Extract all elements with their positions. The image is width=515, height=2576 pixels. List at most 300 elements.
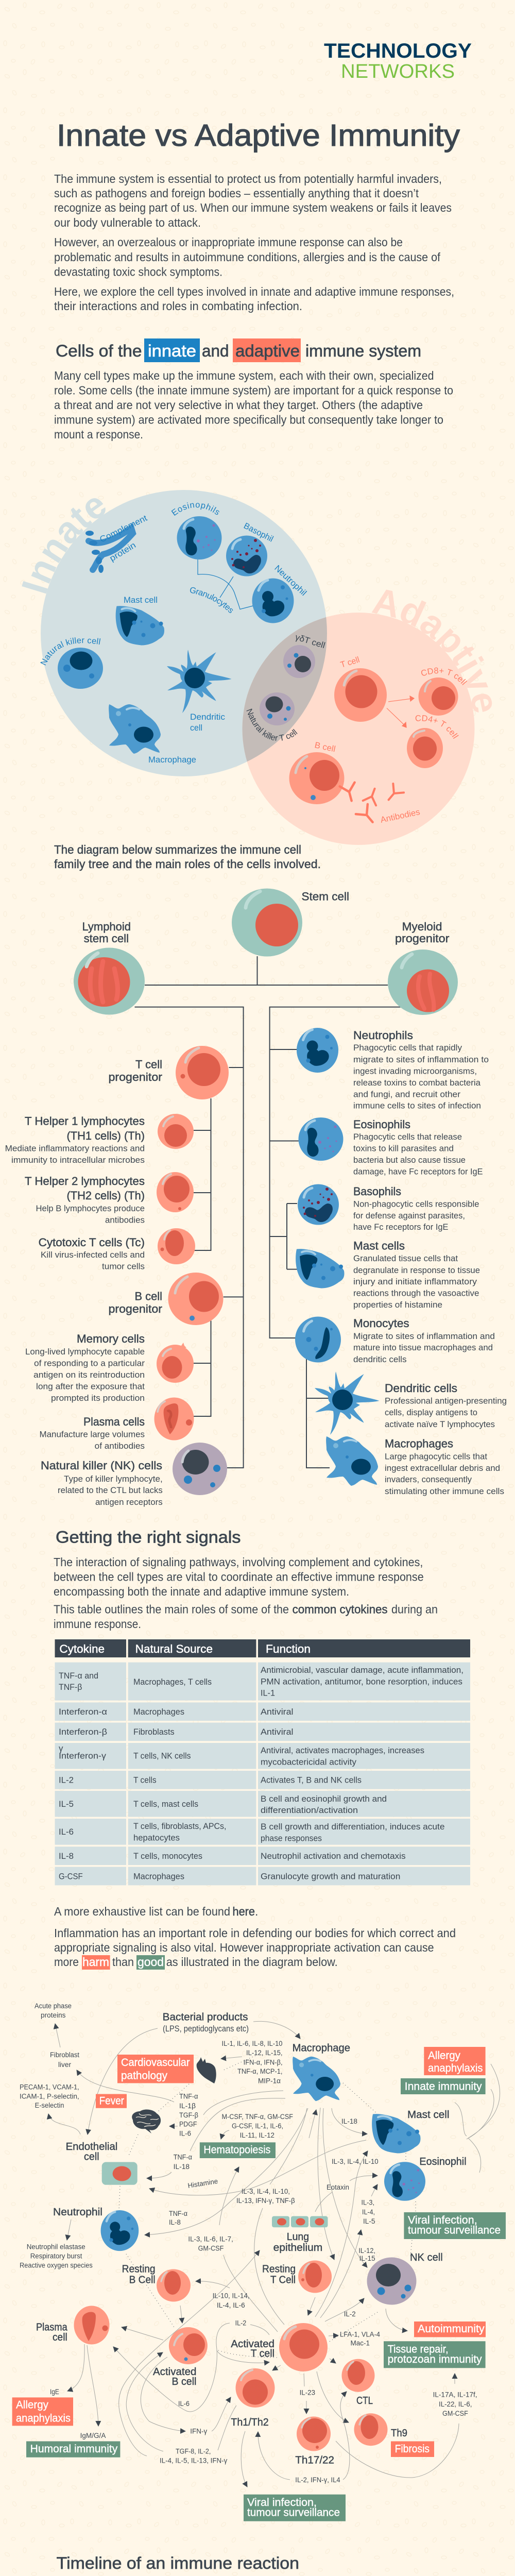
intro text: The immune system is essential to protect us from potentially harmful invaders,	[54, 172, 442, 185]
myeloid progenitor: Myeloid	[402, 920, 442, 933]
table header	[55, 1639, 470, 1657]
box: cardiovascular pathology: Cardiovascular	[121, 2057, 190, 2069]
heading: timeline of an immune reaction: Timeline of an immune reaction	[57, 2554, 299, 2572]
network: CTL cell: CTL	[356, 2395, 373, 2406]
table text: T cells, monocytes	[133, 1851, 202, 1861]
table text: B cell growth and differentiation, induces acute	[261, 1822, 445, 1832]
inflammation paragraph: A more exhaustive list can be found	[54, 1905, 230, 1918]
network: eosinophil: Eosinophil	[419, 2156, 467, 2167]
table text: mycobactericidal activity	[261, 1757, 357, 1767]
network labels: cytokines: IL-1, IL-6, IL-8, IL-10	[221, 2040, 282, 2047]
cytotoxic T cells	[39, 1228, 195, 1272]
macrophages: stimulating other immune cells	[385, 1486, 504, 1496]
table text: phase responses	[261, 1833, 322, 1843]
box: allergy anaphylaxis (left)	[12, 2397, 73, 2426]
neutrophils: Phagocytic cells that rapidly	[353, 1043, 462, 1053]
intro text: such as pathogens and foreign bodies – essentially anything that it doesn’t	[54, 187, 419, 200]
basophil	[226, 521, 275, 576]
table text: G-CSF	[59, 1871, 83, 1882]
network labels: cytokines: MIP-1α	[258, 2077, 281, 2084]
network labels: cytokines: proteins	[41, 2011, 66, 2019]
logo: Technology Networks: TECHNOLOGY	[324, 40, 472, 62]
dendritic cells	[315, 1371, 507, 1435]
network: activated B cell: B cell	[172, 2376, 196, 2387]
CD8 T cell	[418, 668, 468, 716]
network labels: cytokines: Eotaxin	[327, 2183, 349, 2191]
network: activated B cell	[153, 2327, 208, 2387]
plasma cells: Manufacture large volumes	[39, 1430, 145, 1439]
inflammation paragraph: here	[233, 1905, 255, 1918]
dendritic cell: Dendritic	[190, 713, 225, 722]
natural killer T cell: Natural killer T cell	[246, 709, 298, 741]
arrows T cell to CD8 and CD4	[387, 696, 414, 727]
cytotoxic T cells: Kill virus-infected cells and	[41, 1250, 145, 1260]
family tree intro	[54, 843, 321, 871]
network: endothelial cell: cell	[84, 2151, 99, 2163]
network labels: cytokines: Acute phase	[35, 2002, 72, 2010]
natural killer cell: Natural killer cell	[40, 637, 101, 666]
table text	[59, 1665, 464, 1882]
intro text: their interactions and roles in combating infection.	[54, 299, 302, 313]
macrophages: invaders, consequently	[385, 1475, 472, 1484]
network: Th1/Th2 cell: Th1/Th2	[231, 2417, 269, 2428]
network: NK cell: NK cell	[410, 2252, 443, 2263]
network labels: cytokines: IL-13, IFN-γ, TNF-β	[236, 2197, 295, 2205]
neutrophils: and fungi, and recruit other	[353, 1089, 460, 1099]
inflammation network: connector arrows	[48, 2021, 500, 2487]
macrophages	[326, 1436, 504, 1496]
mast cells: injury and initiate inflammatory	[353, 1277, 477, 1286]
network labels: cytokines: Neutrophil elastase	[27, 2243, 85, 2250]
monocytes: dendritic cells	[353, 1354, 407, 1364]
box: viral infection, tumour surveillance (right)	[404, 2212, 506, 2239]
signals paragraph: between the cell types are vital to coordinate an effective immune response	[54, 1570, 424, 1584]
box: autoimmunity: Autoimmunity	[418, 2323, 485, 2335]
intro text: Here, we explore the cell types involved in innate and adaptive immune responses,	[54, 285, 454, 298]
basophils: Basophils	[353, 1185, 401, 1198]
signals paragraph: during an	[391, 1603, 438, 1616]
complement protein	[85, 513, 149, 573]
T cell progenitor: T cell	[135, 1058, 162, 1071]
memory cells	[25, 1332, 194, 1403]
lymphoid stem cell	[74, 920, 145, 1015]
basophils: for defense against parasites,	[353, 1211, 465, 1221]
cells paragraph: Many cell types make up the immune system, each with their own, specialized	[54, 369, 434, 382]
title: Innate vs Adaptive Immunity	[57, 118, 460, 152]
memory cells: antigen on its reintroduction	[33, 1370, 145, 1380]
T helper 2: antibodies	[105, 1215, 145, 1225]
box: fever: Fever	[99, 2095, 124, 2107]
natural killer cells	[41, 1443, 227, 1507]
table text: Antiviral	[261, 1727, 294, 1737]
network: Th17/22 cell: Th17/22	[295, 2455, 334, 2466]
box: fibrosis: Fibrosis	[395, 2443, 430, 2455]
network labels: cytokines: IL-3, IL-6, IL-7,	[188, 2235, 233, 2243]
intro text: devastating toxic shock symptoms.	[54, 265, 222, 278]
network labels: cytokines: IFN-α, IFN-β,	[244, 2058, 283, 2066]
macrophages: Large phagocytic cells that	[385, 1452, 487, 1461]
box: allergy anaphylaxis (left): Allergy	[16, 2399, 48, 2411]
eosinophils: Eosinophils	[353, 1118, 410, 1131]
network labels: cytokines: IL-18	[174, 2163, 190, 2171]
dendritic cells: cells, display antigens to	[385, 1408, 477, 1417]
memory cells: Memory cells	[77, 1332, 145, 1345]
network labels: cytokines: TGF-β	[179, 2111, 198, 2119]
network: resting B cell: Resting	[122, 2264, 156, 2275]
eosinophils: damage, have Fc receptors for IgE	[353, 1166, 483, 1177]
venn diagram: innate and adaptive cells	[22, 490, 492, 845]
T helper 1: immunity to intracellular microbes	[11, 1155, 145, 1165]
intro text: recognize as being part of us. When our immune system weakens or fails it leaves	[54, 201, 452, 214]
table text: T cells, mast cells	[133, 1799, 198, 1809]
network labels: cytokines: GM-CSF	[198, 2244, 224, 2252]
granulocytes bracket	[190, 560, 253, 613]
network labels: cytokines: IL-12,	[358, 2247, 375, 2255]
inflammation network: dotted links	[119, 2056, 416, 2358]
network: plasma cell	[36, 2306, 109, 2344]
table text: B cell and eosinophil growth and	[261, 1794, 387, 1804]
neutrophil	[252, 564, 308, 623]
network labels: cytokines: IL-15	[359, 2255, 375, 2262]
network: resting T cell: T Cell	[270, 2275, 296, 2286]
network labels: cytokines: IL-4,	[362, 2208, 375, 2216]
table text: differentiation/activation	[261, 1805, 358, 1815]
table text: Fibroblasts	[133, 1727, 175, 1737]
network labels: cytokines: IL-18	[341, 2117, 357, 2125]
B cell progenitor: progenitor	[108, 1302, 162, 1315]
neutrophils: ingest invading microorganisms,	[353, 1066, 477, 1076]
plasma cells	[39, 1397, 194, 1451]
box: hematopoiesis: Hematopoiesis	[203, 2144, 270, 2156]
network: macrophage: Macrophage	[293, 2043, 350, 2054]
signals paragraph: encompassing both the innate and adaptive immune system.	[54, 1585, 349, 1598]
T helper 2: Help B lymphocytes produce	[36, 1204, 145, 1213]
T helper 1: (TH1 cells) (Th)	[67, 1129, 145, 1142]
network labels: cytokines: IL-5	[363, 2217, 375, 2225]
T helper 1: Mediate inflammatory reactions and	[5, 1144, 145, 1153]
eosinophils: Phagocytic cells that release	[353, 1132, 462, 1142]
complement protein: Complement	[98, 513, 149, 545]
T helper 1	[5, 1114, 194, 1165]
network labels: cytokines: Respiratory burst	[30, 2252, 82, 2260]
table text: IL-6	[59, 1827, 74, 1837]
network labels: cytokines: PDGF	[179, 2120, 197, 2128]
dendritic cells: Professional antigen-presenting	[385, 1396, 507, 1406]
basophil: Basophil	[242, 521, 275, 544]
table text: IL-8	[59, 1851, 74, 1861]
heading: cells of the innate and adaptive immune system: adaptive	[235, 342, 300, 360]
network: activated T cell: Activated	[231, 2338, 274, 2350]
intro text: our body vulnerable to attack.	[54, 216, 201, 229]
table text: T cells	[133, 1775, 157, 1785]
table text: Interferon-γ	[59, 1751, 107, 1760]
network: Th17/22 cell	[295, 2416, 334, 2466]
network labels: cytokines: Histamine	[187, 2177, 218, 2190]
bacterial products: (LPS, peptidoglycans etc)	[163, 2024, 249, 2033]
network labels: cytokines: IgE	[50, 2388, 59, 2396]
neutrophils	[297, 1028, 489, 1111]
natural killer cells: Type of killer lymphocyte,	[64, 1474, 163, 1484]
table text: Interferon-β	[59, 1727, 107, 1737]
eosinophil: Eosinophils	[171, 502, 219, 516]
network: Th9 cell: Th9	[391, 2428, 407, 2439]
inflammation paragraph: Inflammation has an important role in defending our bodies for which correct and	[54, 1926, 456, 1940]
box: humoral immunity: Humoral immunity	[30, 2443, 118, 2455]
lymphoid stem cell: Lymphoid	[82, 920, 131, 933]
network labels: cytokines: IL-2	[344, 2310, 356, 2318]
natural killer cells: antigen receptors	[95, 1497, 163, 1507]
network labels: cytokines: IL-2, IFN-γ, IL4	[295, 2476, 340, 2484]
dendritic cells: activate naïve T lymphocytes	[385, 1419, 495, 1429]
monocytes: Migrate to sites of inflammation and	[353, 1331, 495, 1341]
heading: cells of the innate and adaptive immune system: Cells of the	[56, 342, 142, 360]
box: tissue repair, protozoan immunity: protozoan immunity	[388, 2353, 482, 2365]
mast cell	[116, 596, 164, 645]
table text: IL-1	[261, 1688, 275, 1698]
table text: PMN activation, antitumor, bone resorption, induces	[261, 1676, 462, 1687]
network labels: cytokines: ICAM-1, P-selectin,	[20, 2093, 79, 2100]
network labels: cytokines: Reactive oxygen species	[20, 2262, 93, 2269]
table text: Antiviral, activates macrophages, increases	[261, 1745, 424, 1755]
network labels: cytokines: IL-6	[179, 2130, 191, 2138]
T cell: T cell	[339, 655, 361, 670]
network labels: cytokines: TNF-α	[169, 2210, 187, 2217]
network: NK cell	[367, 2252, 443, 2305]
cells paragraph: role. Some cells (the innate immune system) are important for a quick response to	[54, 384, 453, 397]
myeloid progenitor	[388, 920, 458, 1015]
CD4 T cell	[407, 715, 459, 768]
network labels: cytokines: TGF-8, IL-2,	[176, 2447, 211, 2455]
network labels: cytokines: IL-12, IL-15,	[246, 2049, 282, 2057]
table text: γ	[59, 1743, 63, 1753]
network labels: cytokines: IL-3,	[362, 2199, 374, 2207]
dendritic cell: cell	[190, 723, 202, 733]
network: resting B cell	[122, 2264, 191, 2302]
monocytes: Monocytes	[353, 1317, 409, 1330]
network labels: cytokines	[20, 2002, 477, 2484]
network labels: cytokines: IL-2	[235, 2319, 246, 2327]
heading: cells of the innate and adaptive immune system: innate	[148, 342, 196, 360]
eosinophil	[171, 502, 221, 560]
network labels: cytokines: Mac-1	[350, 2340, 370, 2347]
dendritic cell	[167, 650, 232, 733]
network: lung epithelium	[272, 2216, 328, 2253]
table text: IL-2	[59, 1775, 74, 1785]
heading: getting the right signals: Getting the right signals	[56, 1528, 241, 1547]
network labels: cytokines: IL-17A, IL-17f,	[433, 2391, 477, 2399]
network labels: cytokines: TNF-α	[174, 2154, 192, 2161]
table text: hepatocytes	[133, 1833, 180, 1843]
curved word adaptive: Adaptive	[372, 589, 492, 713]
plasma cells: of antibodies	[95, 1441, 145, 1451]
plasma cells: Plasma cells	[83, 1415, 145, 1428]
signals paragraph: The interaction of signaling pathways, involving complement and cytokines,	[54, 1555, 423, 1569]
box: humoral immunity	[26, 2441, 120, 2458]
box: allergy anaphylaxis (left): anaphylaxis	[16, 2413, 71, 2425]
box: allergy anaphylaxis (top right): anaphylaxis	[428, 2062, 483, 2074]
network labels: cytokines: IL-3, IL-4, IL-10,	[242, 2188, 290, 2195]
mast cells: Granulated tissue cells that	[353, 1253, 458, 1263]
box: autoimmunity	[414, 2321, 486, 2337]
family tree intro: The diagram below summarizes the immune cell	[54, 843, 301, 856]
mast cells	[296, 1239, 480, 1310]
lymphoid stem cell: stem cell	[84, 932, 129, 945]
network: lung epithelium: epithelium	[273, 2242, 322, 2253]
network labels: cytokines: PECAM-1, VCAM-1,	[20, 2083, 79, 2091]
network: eosinophil	[384, 2156, 467, 2201]
basophils	[298, 1184, 479, 1232]
intro text: However, an overzealous or inappropriate immune response can also be	[54, 235, 403, 249]
eosinophils: toxins to kill parasites and	[353, 1144, 454, 1153]
network: mast cell	[372, 2109, 449, 2154]
table text: Macrophages	[133, 1871, 184, 1882]
myeloid progenitor: progenitor	[395, 932, 449, 945]
network: CTL cell	[342, 2359, 375, 2406]
network labels: cytokines: IL-4, IL-6	[217, 2301, 245, 2309]
cytokine table	[55, 1639, 470, 1885]
box: viral infection, tumour surveillance (center): tumour surveillance	[247, 2507, 340, 2518]
network labels: cytokines: E-selectin	[35, 2102, 64, 2109]
table text: Macrophages, T cells	[133, 1677, 212, 1687]
inflammation paragraph: than	[112, 1955, 134, 1969]
macrophages: ingest extracellular debris and	[385, 1463, 500, 1473]
signals paragraph	[54, 1555, 438, 1631]
T cell progenitor: progenitor	[108, 1071, 162, 1083]
logo: Technology Networks: NETWORKS	[341, 61, 455, 82]
table text: TNF-β	[59, 1682, 82, 1692]
inflammation paragraph: as illustrated in the diagram below.	[166, 1955, 338, 1969]
mast cells: properties of histamine	[353, 1300, 442, 1310]
table text: IL-5	[59, 1799, 74, 1809]
dendritic cells: Dendritic cells	[385, 1382, 457, 1395]
network labels: cytokines: IL-8	[169, 2218, 181, 2226]
box: innate immunity: Innate immunity	[405, 2080, 482, 2093]
network labels: cytokines: IL-10, IL-14,	[213, 2292, 250, 2300]
eosinophils	[299, 1117, 483, 1177]
complement protein: protein	[108, 540, 138, 563]
inflammation paragraph: harm	[82, 1955, 109, 1969]
mast cells: reactions through the vasoactive	[353, 1288, 479, 1298]
table text: Granulocyte growth and maturation	[261, 1871, 400, 1882]
table header: Natural Source	[135, 1642, 213, 1655]
box: cardiovascular pathology: pathology	[121, 2070, 167, 2081]
table text: Macrophages	[133, 1707, 184, 1717]
gamma delta T cell	[283, 633, 326, 678]
network labels: cytokines: Fibroblast	[50, 2051, 79, 2059]
macrophages: Macrophages	[385, 1437, 453, 1450]
box: tissue repair, protozoan immunity: Tissue repair,	[388, 2343, 449, 2355]
network: activated T cell	[231, 2323, 328, 2371]
network: lung epithelium: Lung	[287, 2231, 309, 2243]
network: plasma cell: cell	[53, 2332, 67, 2343]
basophils: have Fc receptors for IgE	[353, 1222, 448, 1232]
neutrophils: immune cells to sites of infection	[353, 1101, 481, 1111]
network labels: cytokines: IL-6	[178, 2400, 190, 2408]
T helper 2: T Helper 2 lymphocytes	[25, 1175, 145, 1188]
signals paragraph: This table outlines the main roles of some of the	[54, 1603, 289, 1616]
signals paragraph: common cytokines	[293, 1603, 388, 1616]
table header: Cytokine	[59, 1642, 105, 1655]
intro text: problematic and results in autoimmune conditions, allergies and is the cause of	[54, 250, 441, 264]
macrophage	[109, 704, 196, 765]
network: endothelial cell	[66, 2141, 138, 2185]
bacterial products: Bacterial products	[163, 2012, 248, 2023]
neutrophils: Neutrophils	[353, 1029, 413, 1042]
granulocytes bracket: Granulocytes	[190, 587, 233, 613]
inflammation paragraph: good	[138, 1955, 164, 1969]
box: viral infection, tumour surveillance (center): Viral infection,	[247, 2497, 317, 2509]
network labels: cytokines: GM-CSF	[442, 2410, 468, 2417]
inflammation paragraph: more	[54, 1955, 79, 1969]
T helper 2	[25, 1172, 194, 1225]
network labels: cytokines: IL-3, IL-4, IL-10	[332, 2158, 379, 2165]
B cell: B cell	[314, 740, 336, 754]
inflammation paragraph: .	[255, 1905, 258, 1918]
stem cell: Stem cell	[302, 890, 349, 903]
neutrophils: migrate to sites of inflammation to	[353, 1055, 489, 1064]
network labels: cytokines: IL-23	[300, 2388, 315, 2396]
curved word innate: Innate	[22, 498, 106, 594]
cells paragraph: immune system) are activated more specifically but consequently take longer to	[54, 413, 443, 427]
network labels: cytokines: liver	[58, 2061, 71, 2069]
cells paragraph	[54, 369, 453, 441]
network: macrophage	[293, 2043, 350, 2101]
network labels: cytokines: IL-11, IL-12	[240, 2131, 274, 2139]
box: cardiovascular pathology	[117, 2055, 194, 2083]
memory cells: prompted its production	[51, 1393, 145, 1403]
mast cells: degranulate in response to tissue	[353, 1265, 480, 1275]
basophils: Non-phagocytic cells responsible	[353, 1199, 479, 1209]
memory cells: of responding to a particular	[34, 1358, 145, 1368]
B cell progenitor: B cell	[135, 1290, 162, 1302]
icon: brain	[132, 2110, 161, 2133]
eosinophils: bacteria but also cause tissue	[353, 1155, 466, 1165]
neutrophil: Neutrophil	[272, 564, 308, 598]
network labels: cytokines: IL-1β	[179, 2102, 196, 2110]
table text: T cells, NK cells	[133, 1751, 191, 1760]
innate circle	[41, 490, 327, 776]
adaptive circle	[242, 613, 475, 845]
table text: T cells, fibroblasts, APCs,	[133, 1821, 226, 1831]
table rows	[55, 1663, 470, 1885]
macrophage: Macrophage	[148, 755, 196, 765]
heading: cells of the innate and adaptive immune system	[56, 338, 421, 362]
network: activated B cell: Activated	[153, 2366, 196, 2378]
table header: Function	[266, 1642, 311, 1655]
network labels: cytokines: IFN-γ	[190, 2428, 208, 2435]
network: resting T cell: Resting	[262, 2264, 296, 2275]
network: resting T cell	[262, 2261, 332, 2293]
gamma delta T cell: γδT cell	[294, 633, 326, 650]
network: mast cell: Mast cell	[407, 2109, 449, 2121]
T cell	[334, 655, 387, 722]
box: viral infection, tumour surveillance (right): Viral infection,	[408, 2214, 477, 2226]
cytotoxic T cells: Cytotoxic T cells (Tc)	[39, 1236, 145, 1249]
monocytes	[295, 1317, 495, 1364]
family tree intro: family tree and the main roles of the cells involved.	[54, 857, 321, 871]
network labels: cytokines: TNF-α	[179, 2093, 198, 2100]
family tree connector lines	[135, 956, 401, 1468]
cells paragraph: mount a response.	[54, 428, 143, 441]
inflammation paragraph	[54, 1905, 456, 1970]
heading: cells of the innate and adaptive immune system: and	[202, 342, 229, 360]
stem cell	[232, 888, 349, 956]
box: innate immunity	[401, 2078, 486, 2094]
cytotoxic T cells: tumor cells	[102, 1262, 145, 1272]
table text: Antiviral	[261, 1707, 294, 1717]
intro text	[54, 172, 454, 313]
memory cells: long after the exposure that	[36, 1382, 145, 1392]
